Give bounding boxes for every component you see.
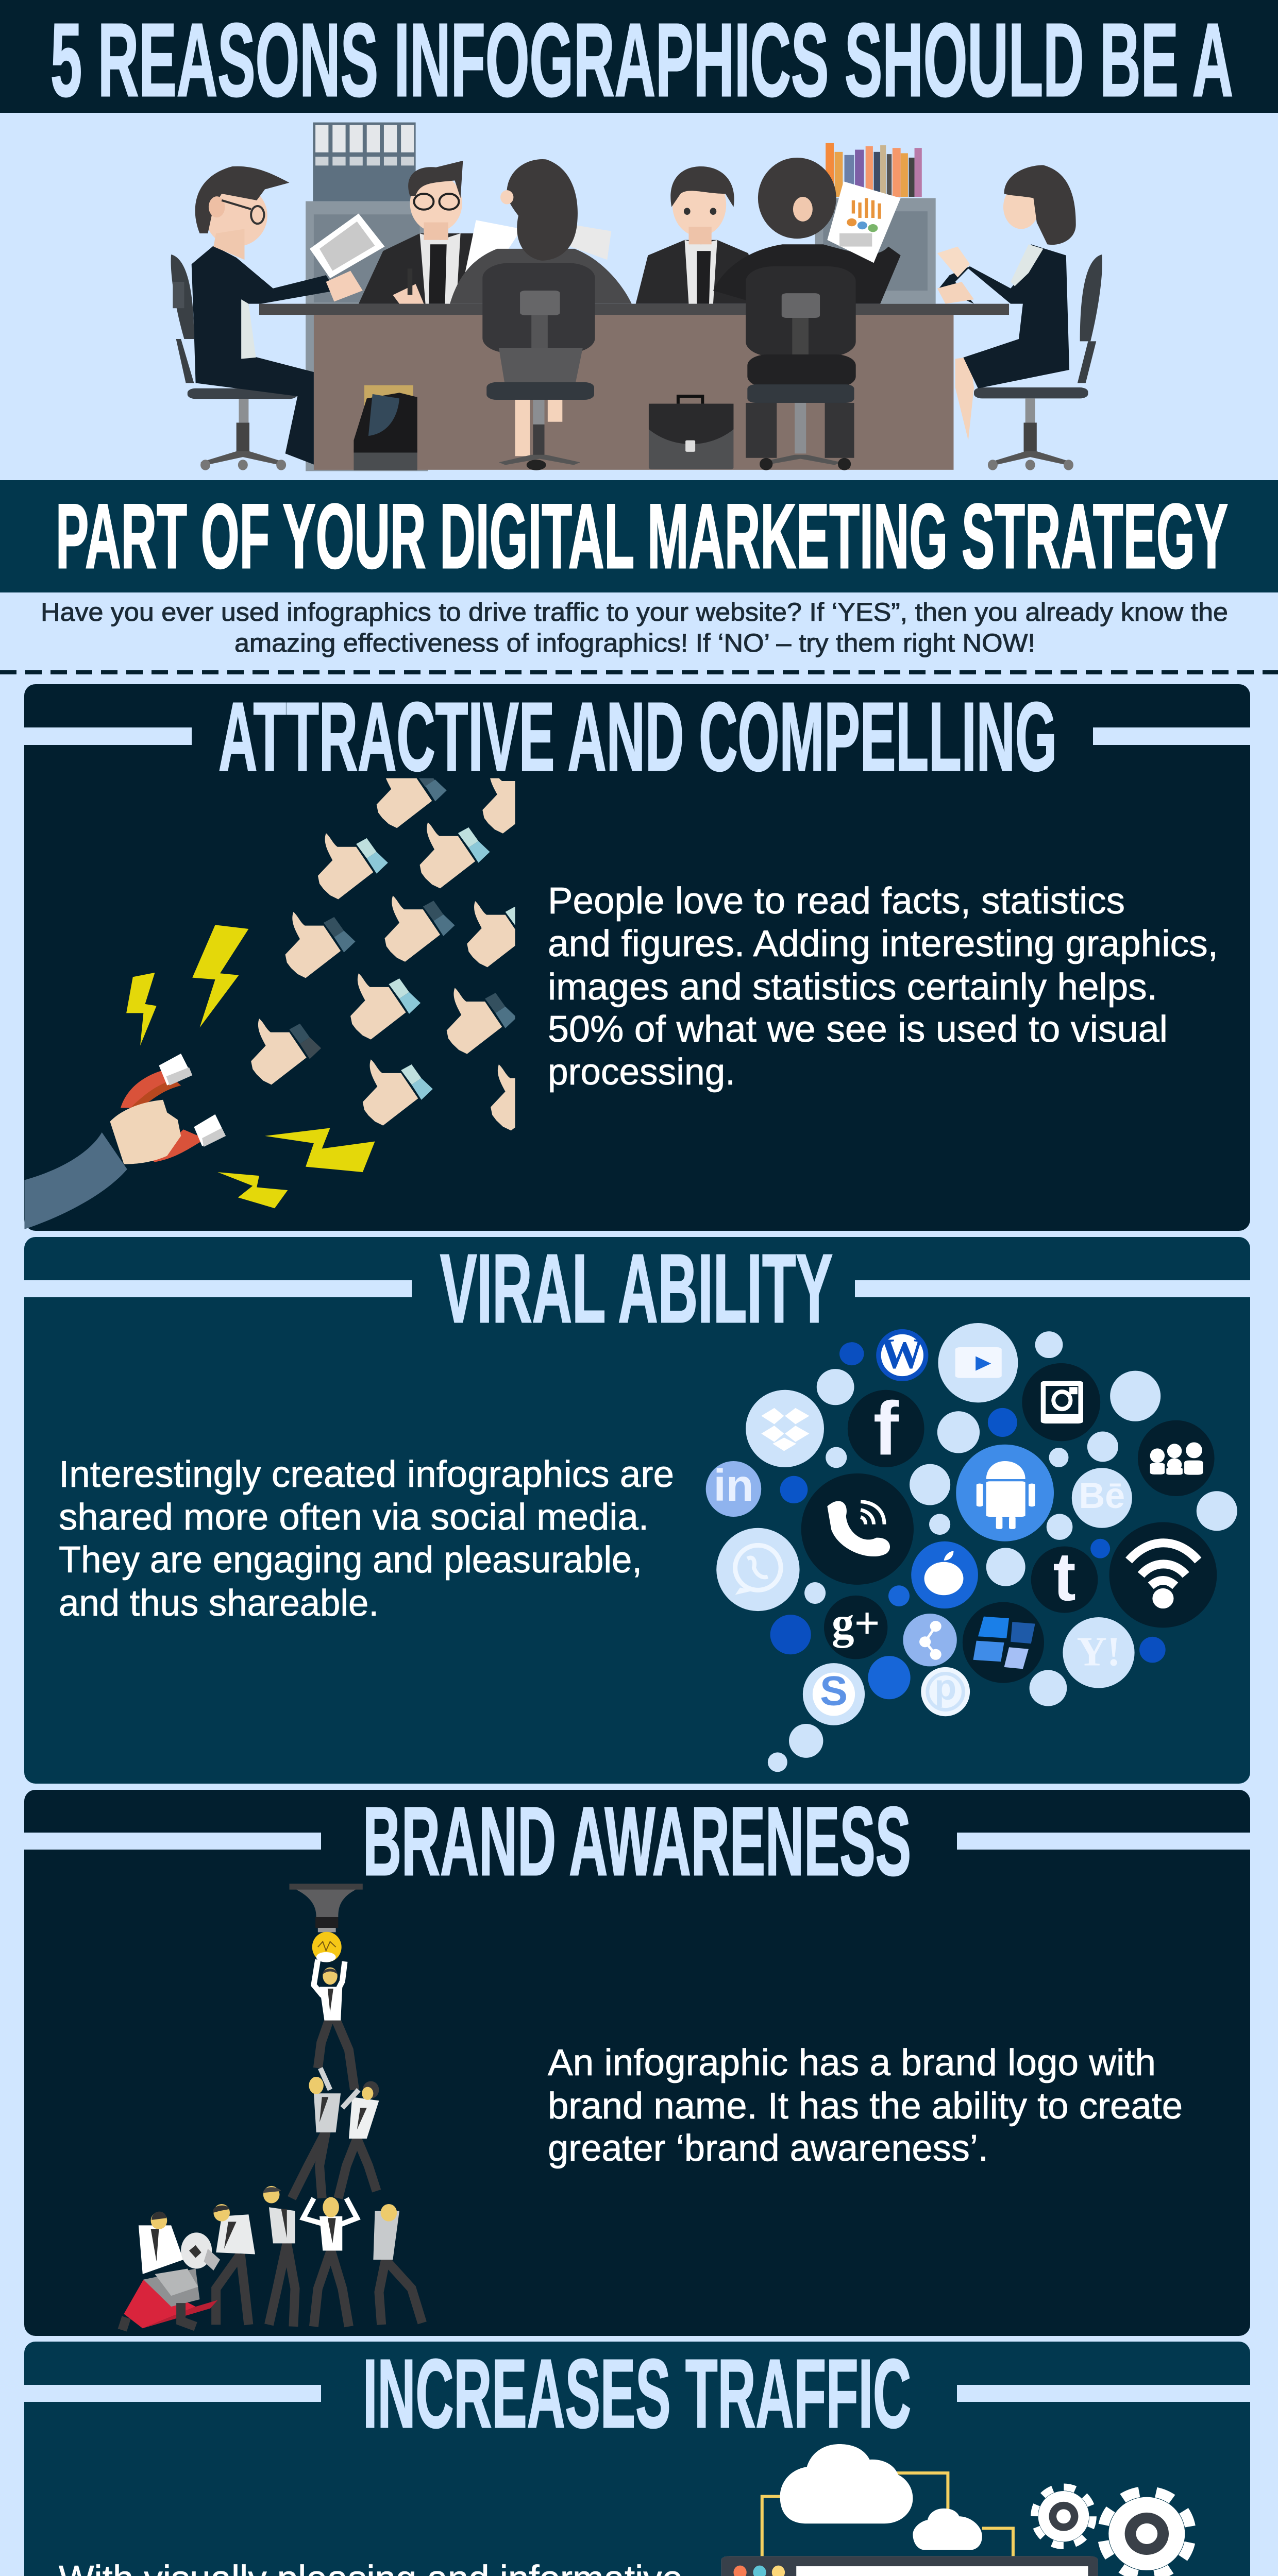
papers behind the table [465,220,611,275]
binders [313,123,416,201]
person: man with glasses, centre left [359,161,489,304]
figures: bottom tier [139,2186,422,2327]
icon: google plus: g+ [832,1598,880,1648]
person: man from behind holding chart [713,158,901,470]
intro text: Have you ever used infographics to drive traffic to your website? If ‘YES”, then you already know the [41,598,1228,626]
illustration: social media bubbles [706,1323,1237,1772]
paper held by left man [310,213,385,278]
body text [59,1454,674,1624]
books [826,143,922,197]
illustration: team reaching for light bulb [122,1884,422,2330]
figures: middle tier [292,2068,379,2198]
body text: shared more often via social media. [59,1497,649,1538]
icon: people [1150,1442,1203,1475]
icon: wifi [1129,1543,1198,1608]
panel: brand awareness [0,1787,1278,2336]
icon: linkedin: in [713,1460,753,1511]
panel: attractive and compelling [0,683,1278,1231]
red box [122,2269,217,2330]
panel: viral ability [0,1234,1278,1784]
icon: share [919,1621,941,1660]
briefcase [649,396,733,469]
body text: Interestingly created infographics are [59,1454,674,1495]
icon: skype: S [820,1668,848,1714]
magnet and hand [24,1054,226,1229]
icon: wordpress: W [881,1330,924,1378]
body text [548,2042,1183,2169]
magazine holder [354,385,417,470]
body text: and figures. Adding interesting graphics, [548,923,1218,964]
body text: An infographic has a brand logo with [548,2042,1156,2083]
person: man facing front, centre right [636,166,762,304]
person: woman seated right [937,165,1102,470]
connector lines [762,2473,1013,2556]
browser window [721,2556,1098,2576]
header band top [0,0,1278,118]
panel: increases traffic [0,2340,1278,2576]
icon: apple [924,1551,963,1595]
body text: and thus shareable. [59,1583,379,1624]
icon: whatsapp [735,1545,781,1595]
icon: behance: Bē [1079,1475,1125,1516]
illustration: magnet attracting thumbs [24,762,546,1229]
bubbles [706,1323,1237,1772]
body text: They are engaging and pleasurable, [59,1539,642,1581]
heading: VIRAL ABILITY [440,1234,833,1343]
body text: People love to read facts, statistics [548,880,1125,922]
lamp and bulb [289,1884,363,1962]
body text: brand name. It has the ability to create [548,2086,1183,2127]
cabinets [306,198,936,471]
icon: skype [813,1668,855,1716]
icon: windows [973,1617,1035,1669]
icon: phone [827,1501,890,1556]
icon: pinterest [928,1667,963,1710]
table [259,304,1009,470]
person: woman from behind, centre [450,159,632,304]
person: man with glasses, left [171,166,363,470]
icon: yahoo: Y! [1077,1629,1121,1674]
body text: images and statistics certainly helps. [548,967,1157,1008]
gears [1034,2484,1199,2576]
body text: greater ‘brand awareness’. [548,2128,988,2169]
body text [548,880,1218,1093]
body text: 50% of what we see is used to visual [548,1009,1168,1050]
illustration: website on laptop [721,2444,1226,2576]
illustration: business meeting [171,123,1102,471]
icon: android [977,1461,1035,1529]
icon: instagram [1041,1381,1083,1423]
office chair: centre woman [482,263,595,470]
icon: pinterest: p [934,1667,956,1707]
figure: top climber [314,1960,355,2090]
intro text: amazing effectiveness of infographics! If ‘NO’ – try them right NOW! [234,629,1035,657]
intro text [41,598,1228,657]
icon: tumblr: t [1053,1538,1076,1615]
icon: play [955,1347,1002,1378]
lightning bolts [126,925,375,1208]
header band bottom [0,480,1278,592]
icon: dropbox [761,1408,810,1451]
body text: processing. [548,1052,735,1093]
icon: facebook: f [873,1386,899,1471]
clouds [780,2444,982,2550]
